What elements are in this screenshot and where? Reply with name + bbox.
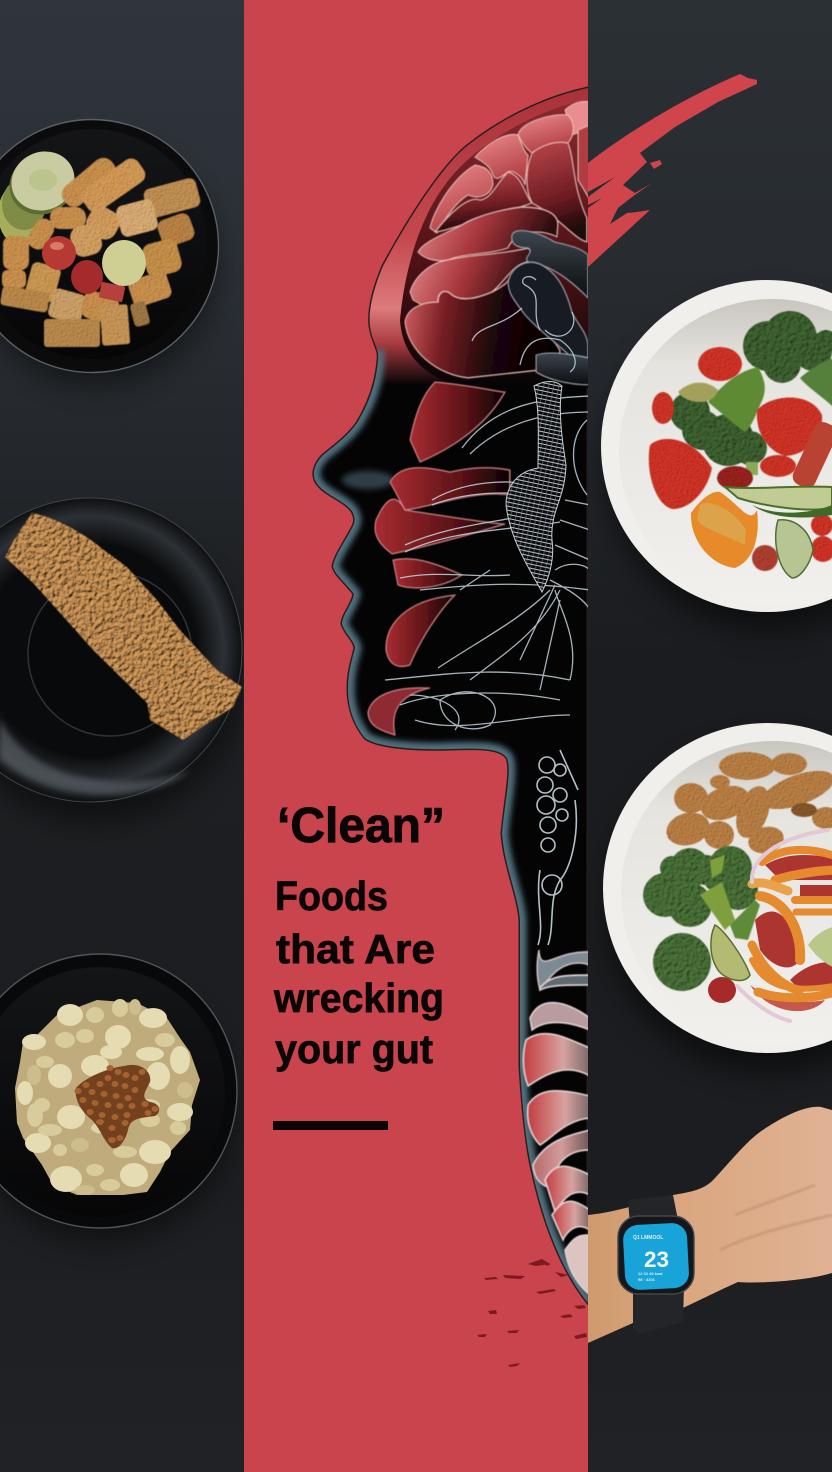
watch band — [628, 1195, 684, 1334]
broccoli florets — [643, 846, 758, 991]
bowl shadows — [0, 143, 243, 1242]
subheading line: Foods: Foods — [275, 873, 388, 919]
brown bean cluster — [76, 1065, 159, 1148]
panel: left dark column — [0, 0, 244, 1472]
bowl: vegetables and strawberries — [601, 280, 832, 612]
bowl: chicken, broccoli and carrots — [603, 723, 832, 1053]
red brush stroke — [588, 74, 757, 267]
bowl: fried pieces — [0, 120, 218, 372]
red pieces — [42, 236, 125, 302]
forehead red band — [360, 80, 592, 386]
hand shading — [720, 1185, 832, 1250]
cucumber chunk — [808, 925, 832, 970]
watch readout: 98 · 3201 — [638, 1277, 656, 1282]
blood splatter marks — [477, 1259, 587, 1367]
panel: right dark column — [588, 0, 832, 1472]
head and body x-ray illustration — [314, 80, 592, 1303]
rib cage — [523, 950, 590, 1295]
lower face red tissue — [368, 382, 510, 735]
subheading line: that Are: that Are — [276, 926, 435, 972]
potato chunk — [102, 240, 146, 286]
face edge sheen — [314, 350, 588, 1303]
blood orange slices — [750, 855, 832, 1011]
cucumber slices — [0, 152, 74, 240]
watch case — [618, 1216, 694, 1294]
pale chunks — [17, 999, 193, 1195]
avocado wedge — [711, 925, 750, 980]
right food column — [588, 280, 832, 1343]
title underline — [273, 1121, 388, 1130]
head silhouette — [314, 88, 588, 1303]
broccoli stems — [678, 358, 832, 475]
watch readout: 12 32 49 kcal — [638, 1271, 662, 1276]
watch readout: 23 — [644, 1247, 669, 1272]
subheading line: your gut: your gut — [275, 1026, 433, 1072]
heading: Clean: ‘Clean” — [277, 799, 445, 853]
crumb-coated bar — [5, 513, 242, 740]
crispy chicken — [663, 752, 832, 857]
orange pepper — [691, 492, 758, 568]
brain lobes — [405, 101, 590, 378]
nose and cheek highlight — [342, 471, 394, 489]
windpipe — [508, 397, 560, 586]
plate: crumbed bar — [0, 498, 242, 802]
bowl: pale chunks and beans — [0, 954, 237, 1228]
red carrot — [792, 422, 832, 486]
pale food mound — [15, 1000, 200, 1195]
left food column — [0, 120, 243, 1242]
panel: centre red column — [244, 0, 588, 1472]
title block — [273, 799, 445, 1130]
dark vessel tubes — [508, 231, 590, 385]
watch screen — [622, 1222, 690, 1291]
cucumber slices — [725, 487, 832, 510]
wrist with smartwatch — [588, 1107, 832, 1343]
fried tofu pieces — [0, 153, 202, 347]
subheading line: wrecking: wrecking — [273, 975, 444, 1021]
nerves and vessels — [385, 277, 590, 730]
bowl shadows — [600, 457, 832, 1072]
dark cavity behind brain — [400, 100, 592, 388]
broccoli florets — [670, 311, 832, 466]
strawberries — [649, 347, 832, 571]
arm and hand — [588, 1107, 832, 1343]
onion strips — [737, 830, 828, 1021]
broccoli stems — [700, 855, 760, 940]
watch readout — [633, 1235, 669, 1282]
neck lace structure — [537, 750, 578, 945]
watch readout: Q1 LMMOOL — [633, 1235, 663, 1241]
carrot strips — [752, 850, 832, 998]
tomato — [708, 977, 736, 1003]
